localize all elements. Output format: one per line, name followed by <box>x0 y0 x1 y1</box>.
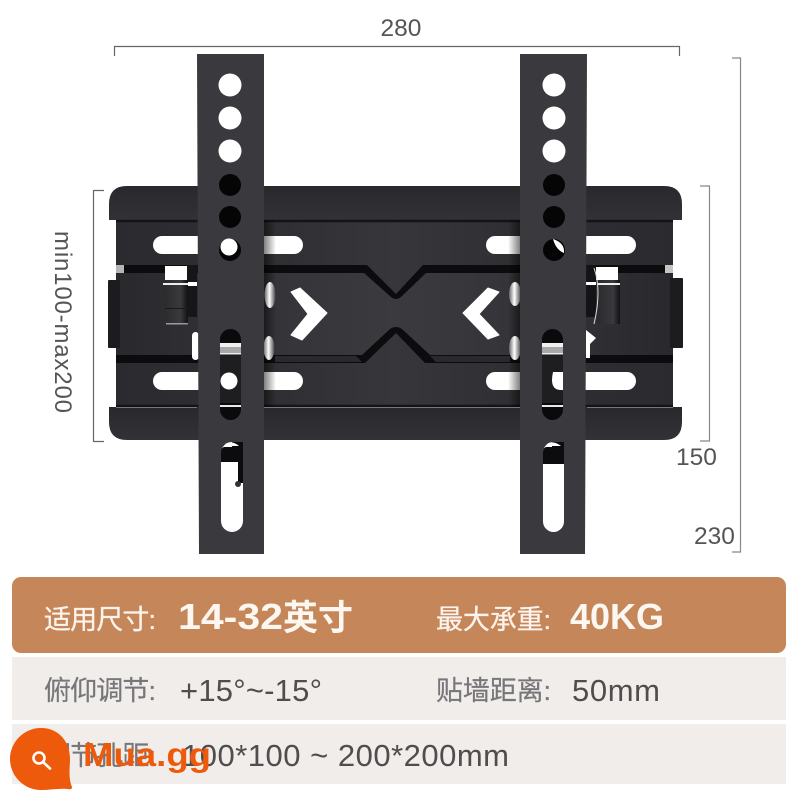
watermark text: Mua.gg <box>83 736 211 773</box>
dimension: adjustable min100-max200 <box>49 190 104 442</box>
icon: chevron left <box>463 288 499 339</box>
bolts left <box>192 282 276 360</box>
side tab left <box>108 280 120 348</box>
plate: upper mounting slots <box>153 236 636 254</box>
row background <box>12 577 786 653</box>
dimension: height 230 <box>694 58 740 552</box>
spec row: size and max load <box>12 577 786 653</box>
value: size: 14-32 <box>178 596 283 637</box>
hole glint <box>553 239 564 253</box>
icon: search bubble <box>10 728 72 790</box>
bolts right <box>509 282 596 360</box>
right vertical bracket <box>520 54 587 554</box>
value: tilt: +15°~-15° <box>180 673 322 708</box>
plate: lower band soft sections <box>275 356 510 362</box>
knob right <box>586 265 620 324</box>
plate: rail edge glints <box>116 265 673 273</box>
left vertical bracket <box>197 54 264 554</box>
label: wall distance: 贴墙距离: <box>436 676 551 706</box>
dimension: height 150 <box>676 186 717 471</box>
plate: bottom flange <box>109 407 682 440</box>
value: wall distance: 50mm <box>572 673 660 708</box>
spec row: tilt and wall distance <box>12 657 786 720</box>
dimension: adjustable min100-max200: min100-max200 <box>49 231 76 413</box>
bracket white holes <box>542 74 566 162</box>
lower adjustment slot <box>221 442 243 532</box>
hole glint <box>220 238 238 256</box>
plate: bracket cast shadows <box>264 220 520 407</box>
bracket white holes <box>218 74 242 162</box>
value: hole spacing: 100*100 ~ 200*200mm <box>182 738 509 773</box>
label: max load: 最大承重: <box>436 605 551 635</box>
value: size <box>178 596 353 638</box>
bracket dark holes <box>219 174 241 261</box>
lower adjustment slot <box>543 442 564 532</box>
label: size: 适用尺寸: <box>44 605 156 635</box>
dimension: height 150: 150 <box>676 444 717 471</box>
row background <box>12 724 786 784</box>
spec row: hole spacing <box>12 724 786 784</box>
wall plate <box>108 186 683 440</box>
plate: lower mounting slots <box>153 372 636 390</box>
bracket body <box>520 54 587 554</box>
plate: middle section <box>116 215 673 411</box>
dimension: height 230: 230 <box>694 523 735 550</box>
bracket body <box>197 54 264 554</box>
dimension: width 280 <box>114 15 680 56</box>
icon: chevron right <box>291 288 327 340</box>
watermark: Mua.gg <box>10 728 211 790</box>
upper adjustment slot <box>542 329 563 420</box>
value: size: 英寸 <box>283 599 353 638</box>
knob left <box>163 265 197 325</box>
plate: top flange <box>109 186 682 220</box>
plate: flange highlights <box>116 406 673 408</box>
plate: flange shadow lines <box>116 221 673 406</box>
side tab right <box>670 278 683 348</box>
upper adjustment slot <box>220 329 241 420</box>
label: hole spacing: 调节孔距: <box>44 741 156 771</box>
label: tilt: 俯仰调节: <box>44 676 156 706</box>
row background <box>12 657 786 720</box>
plate: raised centre with X notch <box>116 265 673 363</box>
dimension: width 280: 280 <box>381 15 421 42</box>
bracket dark holes <box>543 174 565 261</box>
value: max load: 40KG <box>570 596 664 637</box>
